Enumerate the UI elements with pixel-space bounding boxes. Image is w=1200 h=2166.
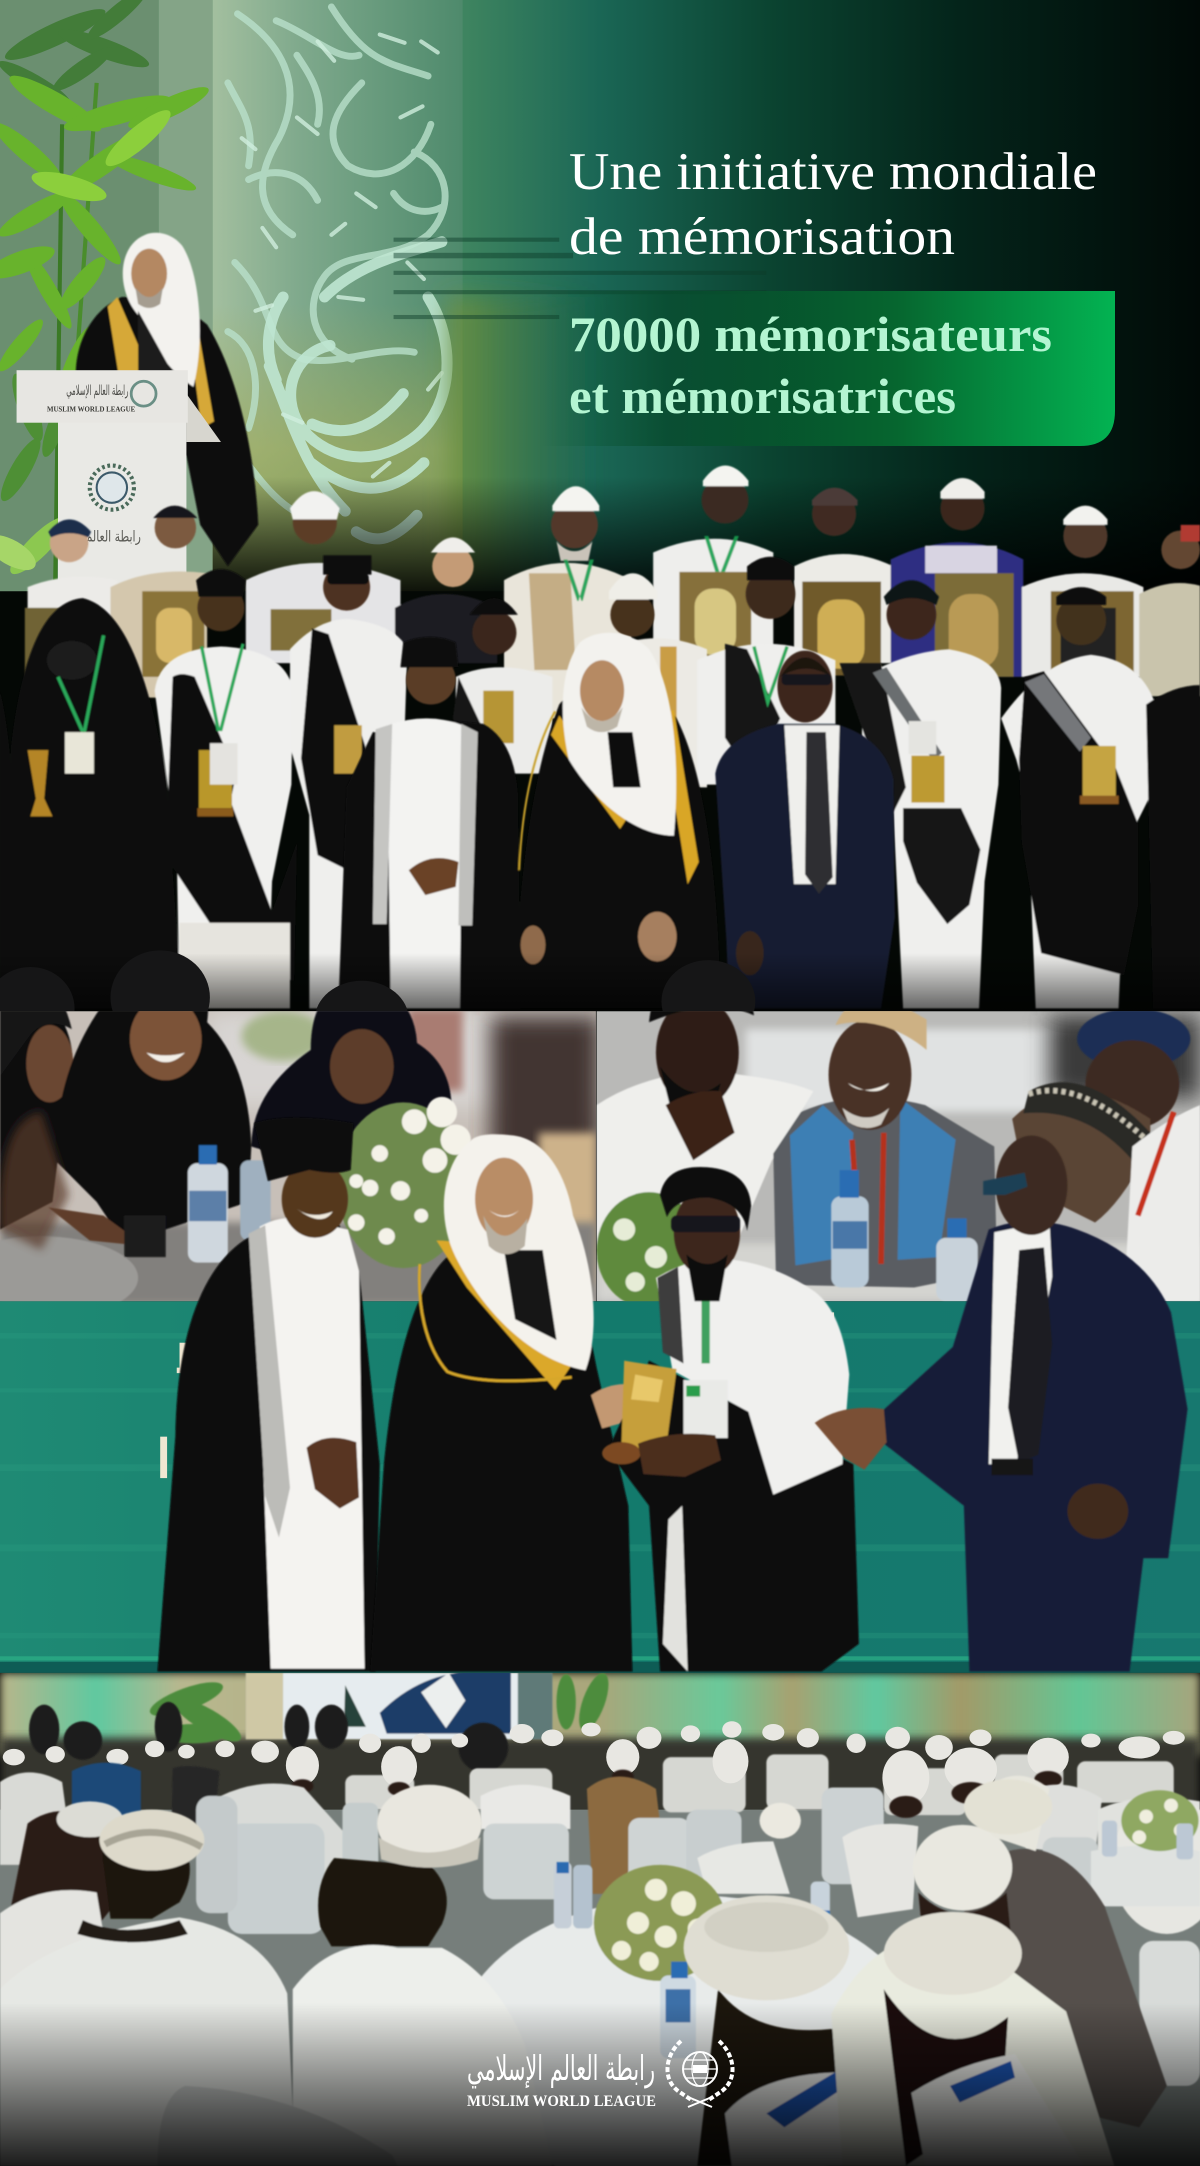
podium: رابطة العالم xyxy=(86,528,141,546)
gold plaques xyxy=(25,572,1134,677)
award scene: left man in black robe xyxy=(157,1118,380,1671)
icon: flower centerpiece xyxy=(337,1097,471,1268)
callout: highlighted statistic: et mémorisatrices xyxy=(569,368,956,424)
teal stage backdrop xyxy=(0,1301,1200,1673)
icon: plant on the left xyxy=(0,0,213,581)
award scene: sheikh in bisht xyxy=(370,1134,643,1671)
group photo: front row xyxy=(338,633,895,1008)
speaker at podium xyxy=(76,233,258,566)
headline: title text xyxy=(569,143,1097,266)
headline: title text: Une initiative mondiale xyxy=(569,143,1097,201)
right audience photo: men at table xyxy=(596,1011,1200,1302)
logo wordmark xyxy=(467,2049,656,2110)
olive glow beside the panel xyxy=(433,290,554,571)
large round table with flowers and bottles xyxy=(481,1861,879,2166)
rows of white robes behind xyxy=(345,1754,1174,1815)
callout: highlighted statistic xyxy=(540,291,1115,446)
white caps across the room xyxy=(3,1721,1185,1805)
audience silhouettes rising into the group photo xyxy=(0,950,755,1011)
logo wordmark: MUSLIM WORLD LEAGUE xyxy=(467,2093,656,2110)
left audience photo: seated women xyxy=(0,1011,596,1302)
callout: highlighted statistic: 70000 mémorisateurs xyxy=(569,306,1052,362)
award scene: recipient with plaque xyxy=(602,1167,859,1671)
dark faces under the caps xyxy=(291,1770,1062,1818)
headline: title text: de mémorisation xyxy=(569,208,955,266)
icon: globe emblem with laurels xyxy=(667,2041,733,2107)
podium: MUSLIM WORLD LEAGUE xyxy=(47,407,136,414)
plant and screen xyxy=(149,1672,610,1744)
award scene: man in navy suit xyxy=(815,1136,1188,1671)
hall photo: audience xyxy=(0,1670,1200,2166)
podium xyxy=(17,370,221,587)
logo wordmark: رابطة العالم الإسلامي xyxy=(467,2049,655,2089)
top photo: stage background xyxy=(0,0,1200,1058)
group photo: back row xyxy=(25,466,1200,718)
dark back crowd xyxy=(29,1702,508,1772)
foreground guests in white xyxy=(0,1776,1167,2166)
calligraphy panel xyxy=(213,0,463,594)
group photo: middle row xyxy=(0,555,1200,1008)
podium: رابطة العالم الإسلامي xyxy=(66,383,128,399)
middle crowd and white chairs xyxy=(0,1763,1200,2086)
horizontal stage stripes xyxy=(394,238,766,319)
logo: Muslim World League xyxy=(467,2041,733,2110)
